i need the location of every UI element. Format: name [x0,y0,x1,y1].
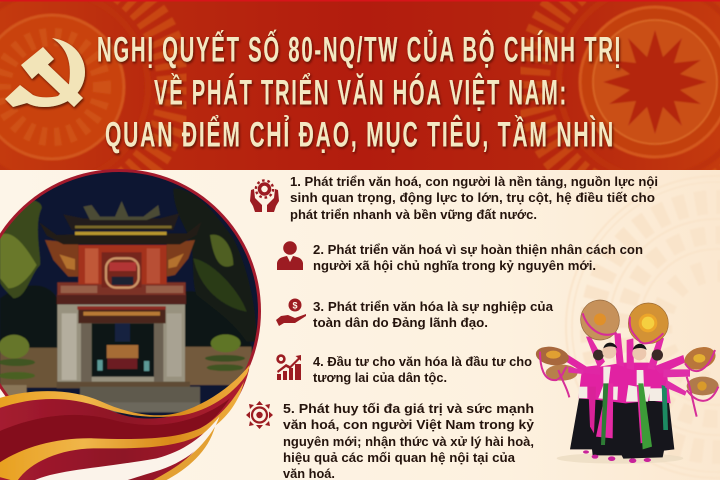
icon: hammer and sickle [5,38,85,107]
opening [78,307,166,323]
upper roof [63,213,179,230]
middle gold band [0,382,244,480]
white band [32,417,219,480]
item 4: investing in the future: 4. Đầu tư cho văn hóa là đầu tư cho [313,354,532,369]
left bronze drum ornament [0,2,186,170]
arms [563,354,600,375]
sashes [596,383,613,438]
photo: dancers with hats [534,297,719,464]
item 5: maximising cultural values: nguyên mới; nhận thức và xử lý hài hoà, [283,434,534,449]
right tree [173,188,257,342]
photo: Temple of Literature in circular frame [0,169,261,418]
icon: gear and hands [250,180,279,212]
item 5: maximising cultural values: hiệu quả các mối quan hệ nội tại của [283,450,516,465]
item 5: maximising cultural values [246,401,535,480]
gate pillars [57,304,185,384]
item 3: cause of the whole people [276,298,554,330]
page background [0,170,720,480]
icon: coin over hand [276,298,306,326]
darker fold [0,398,230,472]
icon: person [277,241,303,270]
white blouses [579,387,587,398]
item 4: investing in the future [277,354,532,385]
heads [593,350,604,360]
icon: growth chart [277,355,301,380]
decorative ribbons [0,364,250,480]
feet [583,450,589,454]
dark tree mass [0,286,57,348]
main hats [577,297,623,343]
left tree [0,199,42,298]
icon: coin over hand: $ [292,300,298,310]
lower gold band [150,427,215,480]
item 1: culture and people foundation: phát triển nhanh và bền vững đất nước. [290,207,537,222]
icon: lotus ornament [246,401,273,429]
eaves [45,240,78,277]
item 5: maximising cultural values: văn hoá, con người Việt Nam trong kỷ [283,417,535,432]
steps [57,382,190,388]
hats back [546,365,578,381]
header banner [0,0,720,170]
item 4: investing in the future: tương lai của dân tộc. [313,370,447,385]
tops [578,363,671,403]
top gold band [0,364,250,417]
item 1: culture and people foundation [250,174,658,222]
item 2: perfecting personality [277,241,643,273]
item 5: maximising cultural values: 5. Phát huy tối đa giá trị và sức mạnh [283,401,534,416]
item 3: cause of the whole people: toàn dân do Đảng lãnh đạo. [313,315,488,330]
item 2: perfecting personality: 2. Phát triển văn hoá vì sự hoàn thiện nhân cách con [313,242,643,257]
item 1: culture and people foundation: sinh quan trọng, động lực to lớn, trụ cột, hệ điều tiết cho [290,190,655,205]
item 2: perfecting personality: người xã hội chủ nghĩa trong kỷ nguyên mới. [313,258,596,273]
bonsai bushes [0,335,29,359]
ribbon scarves [540,313,718,417]
red ribbon body [0,368,249,480]
title [97,30,622,154]
decorative bronze drum watermark [566,176,720,478]
right bronze drum ornament [520,2,720,170]
item 3: cause of the whole people: 3. Phát triển văn hóa là sự nghiệp của [313,299,554,314]
lower roof [39,222,202,244]
balcony [57,294,186,304]
stone walls [0,348,58,388]
item 1: culture and people foundation: 1. Phát triển văn hoá, con người là nền tảng, nguồn lực nội [290,174,658,189]
skirts [570,397,674,459]
upper pavilion [78,245,167,284]
